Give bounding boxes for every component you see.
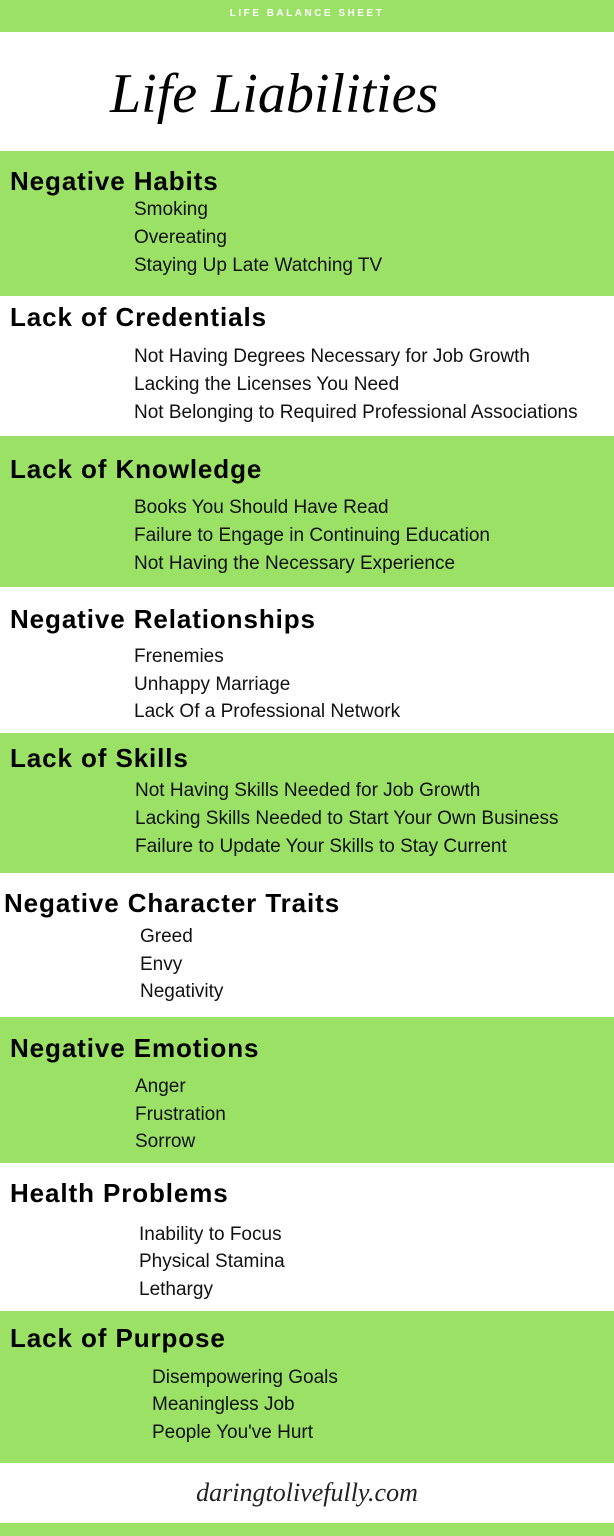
section: Negative Habits (10, 166, 382, 276)
text: People You've Hurt (152, 1422, 313, 1443)
text: Health Problems (10, 1178, 229, 1208)
text: Meaningless Job (152, 1394, 295, 1415)
text: Not Having Skills Needed for Job Growth (135, 780, 480, 801)
title: Life Liabilities (110, 63, 438, 125)
text: Lacking Skills Needed to Start Your Own Business (135, 808, 559, 829)
text: Lack of Purpose (10, 1323, 226, 1353)
text: Lack of Credentials (10, 302, 267, 332)
text: Negative Habits (10, 166, 219, 196)
text: Negative Character Traits (4, 888, 340, 918)
text: Negativity (140, 981, 223, 1002)
text: Failure to Engage in Continuing Education (134, 525, 490, 546)
text: Lacking the Licenses You Need (134, 374, 399, 395)
section: Negative Relationships (10, 604, 400, 722)
text: Books You Should Have Read (134, 497, 389, 518)
text: Inability to Focus (139, 1224, 282, 1245)
text: Physical Stamina (139, 1251, 285, 1272)
text: Smoking (134, 199, 208, 220)
section: Health Problems (10, 1178, 285, 1300)
section: Negative Character Traits (4, 888, 340, 1002)
text: Lethargy (139, 1279, 213, 1300)
text: Anger (135, 1076, 186, 1097)
footer url: daringtolivefully.com (196, 1478, 418, 1507)
section: Lack of Knowledge (10, 454, 490, 574)
text: Lack of Knowledge (10, 454, 262, 484)
text: Frustration (135, 1104, 226, 1125)
text: Lack Of a Professional Network (134, 701, 400, 722)
section: Lack of Credentials (10, 302, 578, 423)
text: Greed (140, 926, 193, 947)
section: Lack of Skills (10, 743, 559, 857)
text: Staying Up Late Watching TV (134, 255, 382, 276)
text: Overeating (134, 227, 227, 248)
text: Negative Relationships (10, 604, 316, 634)
text: Not Having Degrees Necessary for Job Growth (134, 346, 530, 367)
section: Lack of Purpose (10, 1323, 338, 1443)
text: Disempowering Goals (152, 1367, 338, 1388)
header label: LIFE BALANCE SHEET (230, 8, 384, 19)
text: Sorrow (135, 1131, 195, 1152)
text: Lack of Skills (10, 743, 189, 773)
text: Envy (140, 954, 182, 975)
text: Frenemies (134, 646, 224, 667)
section: Negative Emotions (10, 1033, 259, 1152)
text: Not Belonging to Required Professional Associations (134, 402, 578, 423)
text: Unhappy Marriage (134, 674, 290, 695)
text: Failure to Update Your Skills to Stay Current (135, 836, 507, 857)
text: Not Having the Necessary Experience (134, 553, 455, 574)
text: Negative Emotions (10, 1033, 259, 1063)
